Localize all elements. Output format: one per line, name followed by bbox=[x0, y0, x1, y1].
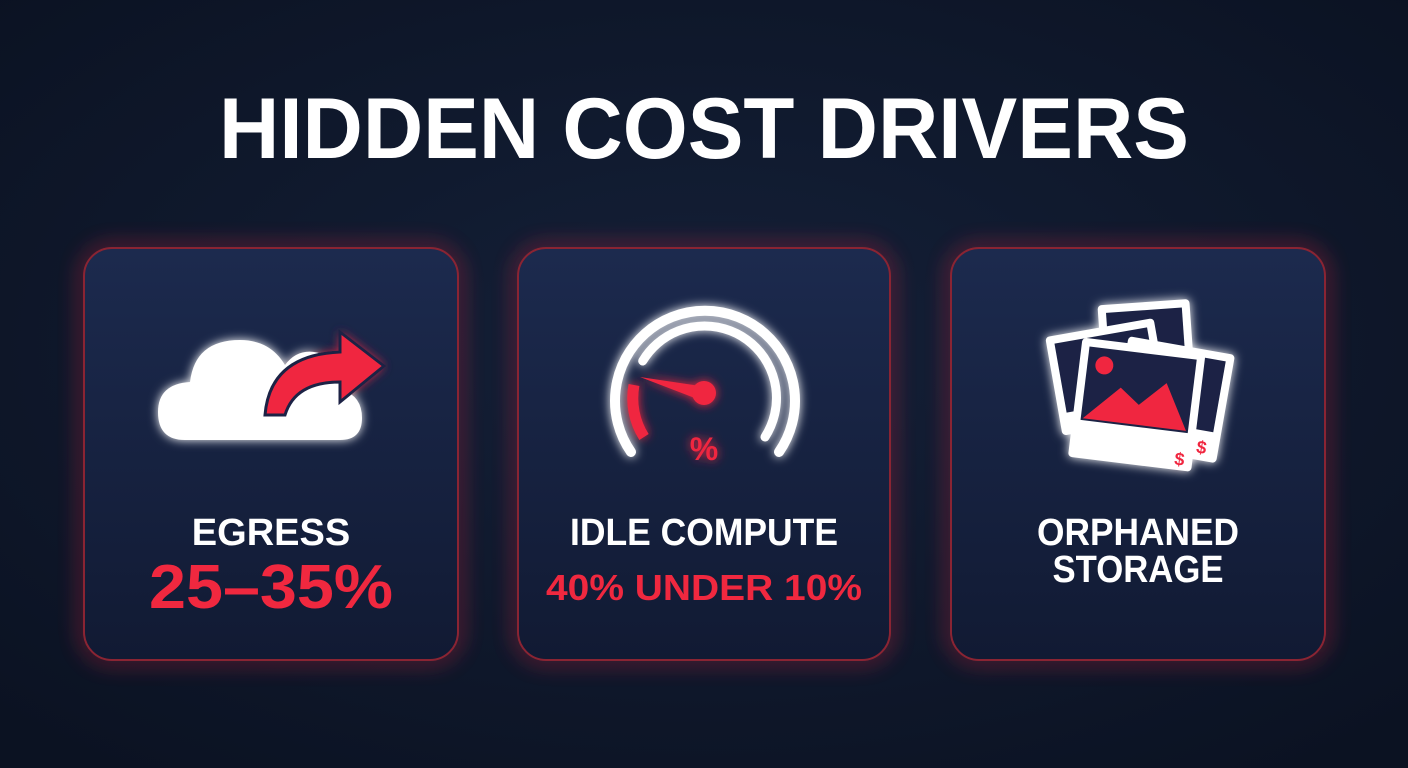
icon: stacked photos: $ bbox=[1195, 437, 1208, 458]
panel: orphaned storage bbox=[951, 248, 1325, 660]
stat: 40% under 10%: 40% UNDER 10% bbox=[546, 567, 862, 608]
title: HIDDEN COST DRIVERS bbox=[219, 81, 1189, 177]
label: orphaned storage: ORPHANED bbox=[1037, 512, 1239, 554]
icon: gauge: % bbox=[690, 431, 718, 467]
icon: cloud with arrow bbox=[158, 332, 384, 440]
label: idle compute: IDLE COMPUTE bbox=[570, 512, 838, 554]
panel: idle compute bbox=[518, 248, 890, 660]
label: egress: EGRESS bbox=[192, 512, 350, 554]
stat: 25-35%: 25–35% bbox=[149, 553, 393, 622]
panel: orphaned storage: STORAGE bbox=[1052, 549, 1224, 591]
icon: gauge bbox=[615, 311, 795, 467]
icon: stacked photos: $ bbox=[1173, 449, 1186, 470]
panel: egress bbox=[84, 248, 458, 660]
icon: stacked photos bbox=[1045, 299, 1235, 472]
